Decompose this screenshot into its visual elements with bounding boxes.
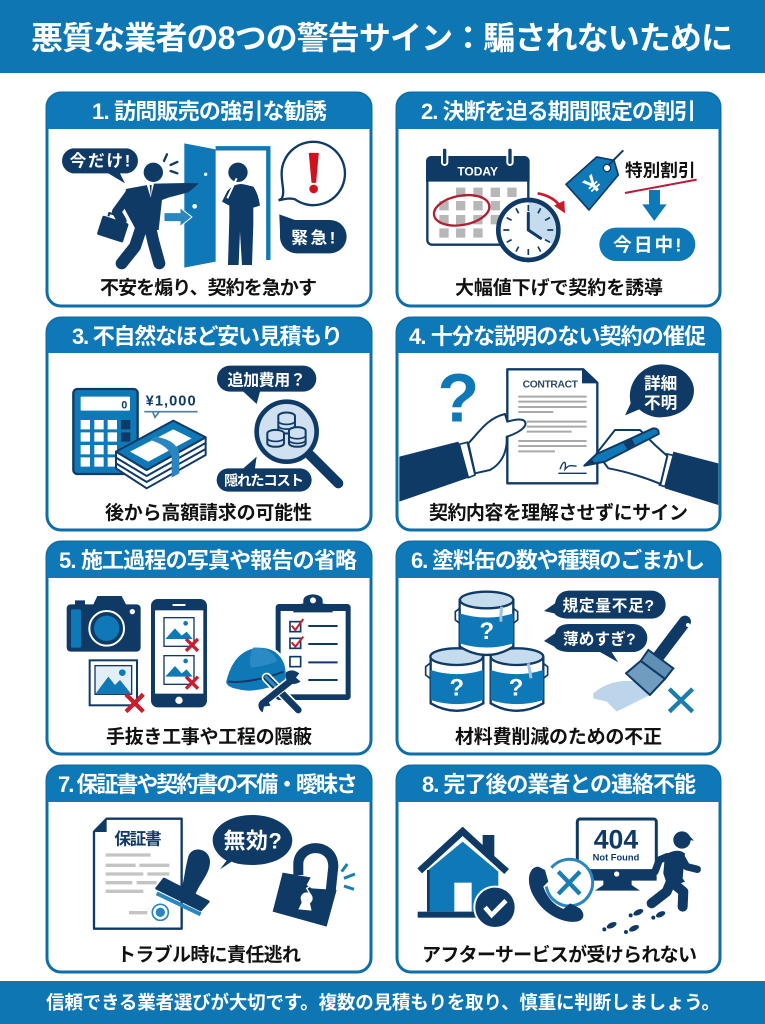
title band [0, 0, 765, 73]
bubble: invalid: 無効? [223, 828, 282, 853]
caption 3: 後から高額請求の可能性 [105, 501, 312, 524]
footer band [0, 981, 765, 1024]
panel 5: omitted construction reports [47, 542, 371, 754]
icon: monitor 404: Not Found [593, 853, 640, 863]
illustration 1 [62, 142, 347, 268]
bubble: urgent: 緊急! [291, 228, 335, 248]
icon: warranty document [93, 818, 182, 929]
icon: footprints [602, 908, 666, 934]
icon: helmet and tools [225, 647, 301, 712]
icon: phone with cross [529, 856, 596, 922]
icon: running person [652, 831, 697, 907]
icon: salesman [97, 154, 199, 263]
icon: calculator [73, 389, 138, 474]
panel 4: signing without explanation [397, 318, 720, 530]
icon: broken lock [273, 848, 355, 927]
icon: price tag: ¥ [579, 170, 607, 199]
icon: door [184, 143, 268, 268]
bubble: hidden cost [217, 457, 312, 492]
icon: monitor 404 [577, 819, 657, 891]
icon: contract: CONTRACT [523, 380, 579, 391]
icon: photo with cross [90, 660, 143, 712]
bubble: exclamation [279, 142, 345, 205]
icon: left hand [399, 414, 525, 502]
panel 1: door-to-door sales [47, 93, 371, 306]
heading 8: 8. 完了後の業者との連絡不能 [422, 772, 696, 797]
icon: paint can right [491, 648, 548, 711]
label: special discount: 特別割引 [625, 161, 696, 181]
bubble: hidden cost: 隠れたコスト [224, 473, 304, 490]
bubble: invalid [213, 815, 292, 869]
icon: stamp [157, 850, 210, 914]
icon: speech bubble unclear [625, 364, 694, 417]
heading 6: 6. 塗料缶の数や種類のごまかし [411, 548, 705, 573]
icon: warranty document: 保証書 [114, 829, 162, 849]
icon: paint can left [426, 648, 483, 711]
footer band: 信頼できる業者選びが大切です。複数の見積もりを取り、慎重に判断しましょう。 [46, 992, 720, 1013]
bubble: shortage [544, 591, 666, 619]
label: price: ¥1,000 [146, 394, 196, 410]
icon: clock [498, 200, 558, 260]
icon: price tag [566, 150, 623, 210]
caption 7: トラブル時に責任逃れ [117, 943, 301, 966]
icon: paint can top [455, 592, 518, 655]
icon: clipboard [276, 594, 351, 700]
icon: paint can right: ? [509, 675, 523, 702]
heading 7: 7. 保証書や契約書の不備・曖昧さ [58, 772, 358, 797]
bubble: too thin: 薄めすぎ? [563, 629, 636, 648]
illustration 5 [67, 594, 351, 712]
heading 1: 1. 訪問販売の強引な勧誘 [92, 99, 327, 124]
caption 6: 材料費削減のための不正 [455, 725, 662, 748]
caption 2: 大幅値下げで契約を誘導 [455, 277, 663, 299]
panel 6: paint can deception [397, 542, 720, 754]
panel 8: contractor unreachable [397, 766, 720, 972]
icon: paint can left: ? [449, 675, 464, 702]
icon: right hand and pen [584, 428, 718, 505]
arrow: down [642, 190, 667, 221]
panel 2: limited-time discount [397, 93, 720, 306]
icon: calendar [426, 150, 530, 245]
icon: calendar: TODAY [457, 165, 498, 179]
label: price [144, 394, 198, 417]
caption 8: アフターサービスが受けられない [422, 943, 697, 966]
caption 5: 手抜き工事や工程の隠蔽 [106, 726, 312, 748]
strike line [625, 180, 697, 193]
bubble: urgent [279, 214, 347, 253]
icon: question mark: ? [437, 361, 479, 437]
panel 7: warranty problems [47, 766, 371, 972]
title band: 悪質な業者の8つの警告サイン：騙されないために [31, 20, 733, 56]
pill: today only [599, 228, 695, 261]
icon: phone [151, 599, 207, 707]
panel 3: unnaturally cheap estimate [47, 318, 371, 530]
icon: speech bubble unclear: 不明 [644, 393, 677, 412]
icon: house [417, 827, 516, 928]
pill: today only: 今日中! [613, 234, 681, 255]
icon: brush [626, 622, 690, 695]
arrow [164, 208, 192, 227]
arrow: red curve [538, 193, 565, 213]
icon: contract [507, 369, 598, 483]
illustration 6 [426, 591, 693, 712]
icon: paint can top: ? [479, 618, 494, 645]
caption 4: 契約内容を理解させずにサイン [429, 502, 688, 524]
bubble: extra cost: 追加費用？ [227, 371, 306, 389]
icon: cross [669, 689, 693, 712]
bubble: shortage: 規定量不足? [562, 597, 654, 615]
heading 4: 4. 十分な説明のない契約の催促 [409, 324, 706, 349]
illustration 4 [399, 361, 718, 505]
bubble: only now: 今だけ! [70, 151, 130, 171]
bubble: extra cost [217, 366, 316, 404]
bubble: only now [62, 148, 138, 183]
bubble: too thin [544, 624, 647, 662]
illustration 3 [73, 366, 338, 492]
icon: calculator: 0 [121, 400, 127, 412]
heading 5: 5. 施工過程の写真や報告の省略 [59, 548, 357, 573]
icon: monitor 404: 404 [594, 824, 638, 854]
icon: resident [222, 163, 260, 265]
caption 1: 不安を煽り、契約を急かす [100, 276, 317, 299]
illustration 2 [426, 150, 697, 261]
icon: camera [67, 596, 141, 652]
icon: magnifier [257, 402, 338, 483]
illustration 8 [417, 819, 697, 934]
heading 3: 3. 不自然なほど安い見積もり [72, 324, 343, 349]
icon: cash stack [116, 421, 206, 488]
icon: paint smear [593, 681, 650, 712]
illustration 7 [93, 815, 355, 929]
icon: speech bubble unclear: 詳細 [644, 373, 677, 393]
heading 2: 2. 決断を迫る期間限定の割引 [421, 99, 696, 124]
